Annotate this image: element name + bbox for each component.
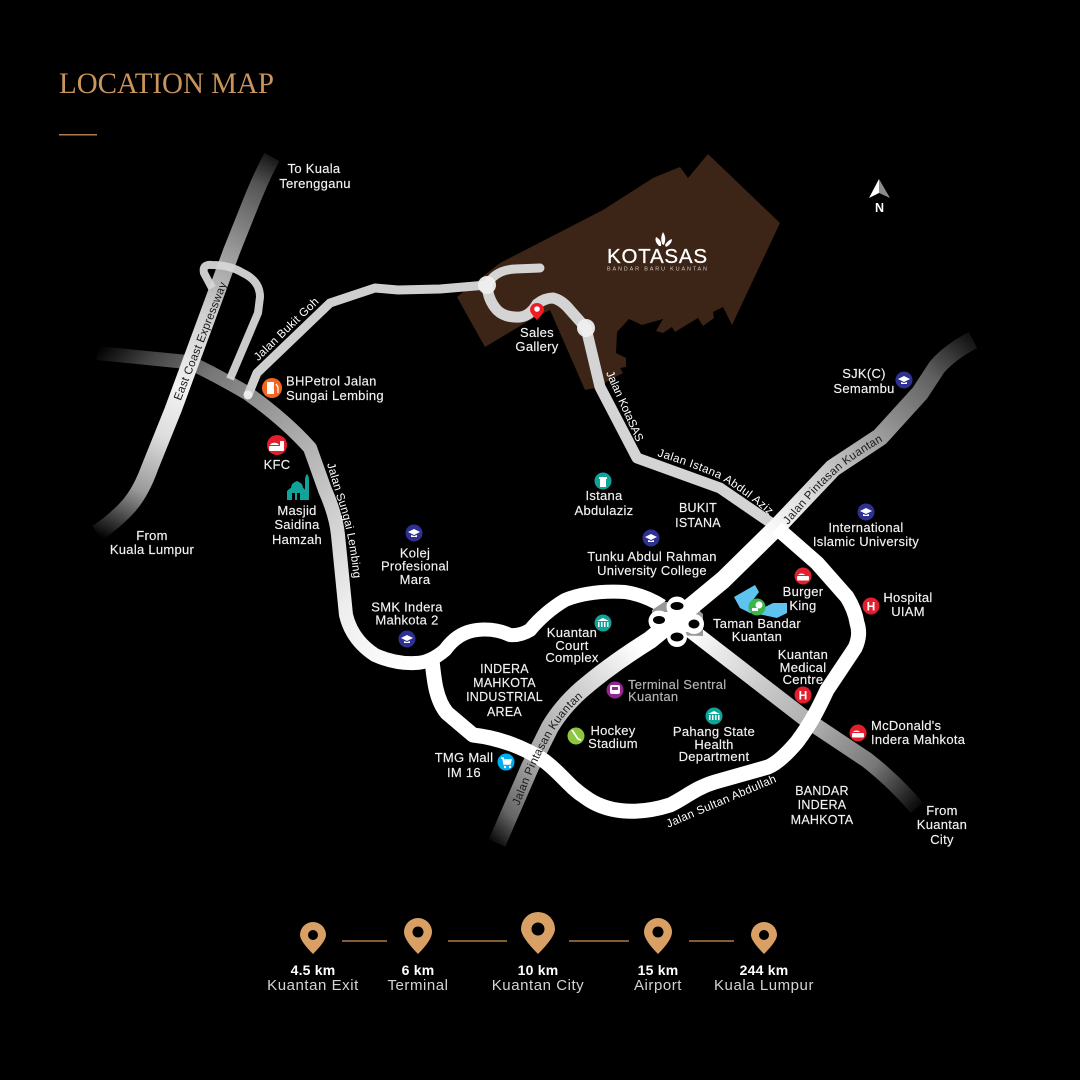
distance: Kuantan City — [492, 912, 584, 994]
place: Kuantan Medical Centre: H — [799, 688, 807, 702]
area label: Bandar Indera Mahkota: BANDAR — [795, 784, 849, 798]
road: East Coast Expressway — [97, 157, 272, 533]
place: Terminal Sentral Kuantan: Terminal Sentral — [628, 677, 726, 692]
place: Pahang State Health Department: Health — [694, 737, 734, 752]
icon: north compass — [869, 179, 890, 215]
place: Kuantan Court Complex: Court — [555, 638, 589, 653]
distance: Airport: 15 km — [638, 962, 678, 978]
road: Jalan Pintasan Kuantan — [497, 340, 973, 843]
direction label: From Kuantan City: City — [930, 832, 954, 847]
road labels: Jalan KotaSAS — [603, 369, 645, 444]
road: Jalan Bukit Goh interchange loop — [204, 265, 260, 379]
place: Hospital UIAM: UIAM — [891, 604, 925, 619]
roundabout openings — [653, 602, 700, 642]
place: BHPetrol: BHPetrol Jalan — [286, 374, 377, 388]
distance: Kuantan Exit — [267, 922, 359, 994]
place: International Islamic University: Islamic University — [813, 534, 919, 549]
place: Kuantan Medical Centre: Kuantan — [778, 647, 828, 662]
distance: Kuala Lumpur: Kuala Lumpur — [714, 977, 814, 994]
place: Hockey Stadium: Stadium — [588, 736, 638, 751]
area label: Indera Mahkota Industrial Area — [466, 662, 543, 719]
area label: Bukit Istana: BUKIT — [679, 501, 717, 515]
road: Jalan Sultan Abdullah ring — [432, 528, 859, 811]
place: TMG Mall IM 16: IM 16 — [447, 765, 481, 780]
place: McDonald's Indera Mahkota — [850, 718, 966, 747]
area label: Bandar Indera Mahkota: INDERA — [798, 798, 847, 812]
distance: Kuantan Exit: 4.5 km — [291, 962, 335, 978]
place: TMG Mall IM 16 — [435, 750, 514, 780]
road labels: Jalan Pintasan Kuantan — [784, 436, 882, 524]
direction label: From Kuala Lumpur: Kuala Lumpur — [110, 542, 195, 557]
place: Masjid Saidina Hamzah — [272, 474, 322, 547]
place: KFC — [264, 435, 290, 472]
place: Burger King: Burger — [783, 584, 824, 599]
place: Pahang State Health Department: Pahang State — [673, 724, 755, 739]
road labels: East Coast Expressway — [172, 280, 230, 402]
road: from Kuantan City — [688, 628, 917, 808]
place: Kuantan Medical Centre — [778, 647, 828, 704]
road: Jalan Sungai Lembing and north ring — [97, 353, 662, 663]
direction label: From Kuantan City — [917, 803, 967, 847]
road labels: Jalan Istana Abdul Aziz — [658, 449, 773, 515]
place: Istana Abdulaziz — [575, 472, 633, 518]
place: Hockey Stadium: Hockey — [590, 723, 636, 738]
area label: Bandar Indera Mahkota: MAHKOTA — [791, 813, 854, 827]
place: Kuantan Court Complex: Complex — [545, 650, 599, 665]
distance: Terminal: 6 km — [402, 962, 434, 978]
logo: KotaSAS — [607, 232, 707, 272]
place: Kuantan Medical Centre: Centre — [783, 672, 823, 687]
area label: Bukit Istana — [675, 501, 721, 530]
distance: Kuala Lumpur: 244 km — [740, 962, 788, 978]
place: Taman Bandar Kuantan with lake: Kuantan — [732, 629, 782, 644]
place: Terminal Sentral Kuantan: Kuantan — [628, 689, 678, 704]
place: Kuantan Court Complex: Kuantan — [547, 625, 597, 640]
place: Kolej Profesional Mara — [381, 524, 449, 587]
place: Kolej Profesional Mara: Kolej — [400, 546, 430, 560]
area label: Indera Mahkota Industrial Area: MAHKOTA — [473, 676, 536, 690]
road labels: Jalan Pintasan Kuantan — [512, 694, 582, 806]
place: BHPetrol: Sungai Lembing — [286, 388, 384, 403]
area label: Indera Mahkota Industrial Area: AREA — [487, 705, 522, 719]
direction label: To Kuala Terengganu — [279, 161, 351, 191]
place: International Islamic University: International — [828, 520, 904, 535]
place: Kolej Profesional Mara: Profesional — [381, 558, 449, 574]
panel: KotaSAS site plot — [457, 154, 780, 390]
distance: Kuantan City: 10 km — [518, 962, 558, 978]
place: Masjid Saidina Hamzah: Hamzah — [272, 532, 322, 547]
place: SMK Indera Mahkota 2: Mahkota 2 — [375, 612, 439, 628]
place label: Sales Gallery with pin: Sales — [520, 325, 554, 340]
direction label: From Kuala Lumpur: From — [136, 528, 168, 543]
place: Kolej Profesional Mara: Mara — [400, 572, 431, 587]
logo: KotaSAS: KOTASAS — [607, 245, 707, 268]
road labels: Jalan Bukit Goh — [252, 296, 321, 364]
area label: Bukit Istana: ISTANA — [675, 516, 721, 530]
place: Masjid Saidina Hamzah: Saidina — [274, 517, 320, 532]
place: McDonald's Indera Mahkota: McDonald's — [871, 718, 942, 733]
place: Terminal Sentral Kuantan — [606, 677, 726, 704]
place: KFC: KFC — [264, 457, 290, 472]
place: SJK(C) Semambu: Semambu — [833, 381, 895, 396]
distance: Kuantan City: Kuantan City — [492, 977, 584, 994]
place: SJK(C) Semambu — [833, 366, 912, 396]
road: site access branch — [487, 268, 540, 285]
place label: Sales Gallery with pin — [515, 303, 559, 354]
icon: north compass: N — [875, 201, 884, 215]
road labels: Jalan Sungai Lembing — [328, 464, 360, 578]
place: Taman Bandar Kuantan with lake — [713, 585, 801, 644]
place label: Sales Gallery with pin: Gallery — [515, 339, 559, 354]
place: Kuantan Court Complex — [545, 614, 612, 665]
distance: Airport: Airport — [634, 977, 682, 994]
place: Hospital UIAM: Hospital — [883, 590, 933, 605]
place: Burger King — [783, 568, 824, 613]
road labels — [172, 280, 912, 830]
distance: Terminal: Terminal — [387, 977, 449, 994]
place: Tunku Abdul Rahman University College — [587, 530, 717, 578]
place: Kuantan Medical Centre: Medical — [780, 660, 826, 675]
area label: Indera Mahkota Industrial Area: INDUSTRIAL — [466, 690, 543, 704]
distance: Kuala Lumpur — [714, 922, 814, 994]
junction circles — [244, 276, 595, 400]
distance: Terminal — [387, 918, 449, 994]
title: LOCATION MAP — [59, 67, 274, 100]
place: Burger King: King — [789, 598, 817, 613]
area label: Bandar Indera Mahkota — [791, 784, 854, 827]
place: Istana Abdulaziz: Abdulaziz — [575, 503, 633, 518]
road: Jalan KotaSAS and Jalan Istana Abdul Aziz — [487, 285, 777, 527]
place: BHPetrol — [262, 374, 384, 403]
place: Pahang State Health Department — [673, 708, 755, 764]
direction label: To Kuala Terengganu: To Kuala — [288, 161, 341, 176]
place: Pahang State Health Department: Department — [679, 749, 749, 764]
place: Masjid Saidina Hamzah: Masjid — [277, 503, 317, 518]
place: Hospital UIAM: H — [867, 600, 875, 614]
place: Tunku Abdul Rahman University College: University College — [597, 563, 707, 578]
roundabout base — [648, 596, 704, 647]
place: TMG Mall IM 16: TMG Mall — [435, 750, 493, 765]
place: SJK(C) Semambu: SJK(C) — [842, 366, 886, 381]
road: Jalan Bukit Goh — [248, 285, 487, 395]
place: International Islamic University — [813, 504, 919, 549]
direction label: From Kuala Lumpur — [110, 528, 195, 557]
direction label: To Kuala Terengganu: Terengganu — [279, 176, 351, 191]
distance: Airport — [634, 918, 682, 994]
place: SMK Indera Mahkota 2 — [371, 600, 443, 648]
area label: Indera Mahkota Industrial Area: INDERA — [480, 662, 529, 676]
road labels: Jalan Sultan Abdullah — [665, 773, 778, 830]
panel: distance strip — [267, 912, 814, 994]
logo: KotaSAS: BANDAR BARU KUANTAN — [607, 266, 707, 272]
place: McDonald's Indera Mahkota: Indera Mahkota — [871, 732, 966, 747]
place: Taman Bandar Kuantan with lake: Taman Bandar — [713, 616, 801, 631]
place: Hockey Stadium — [568, 723, 638, 751]
distance: Kuantan Exit: Kuantan Exit — [267, 977, 359, 994]
place: Istana Abdulaziz: Istana — [585, 488, 623, 503]
place: SMK Indera Mahkota 2: SMK Indera — [371, 600, 443, 614]
place: Tunku Abdul Rahman University College: Tunku Abdul Rahman — [587, 549, 717, 564]
place: Hospital UIAM — [862, 590, 933, 619]
direction label: From Kuantan City: Kuantan — [917, 817, 967, 832]
direction label: From Kuantan City: From — [926, 803, 958, 818]
